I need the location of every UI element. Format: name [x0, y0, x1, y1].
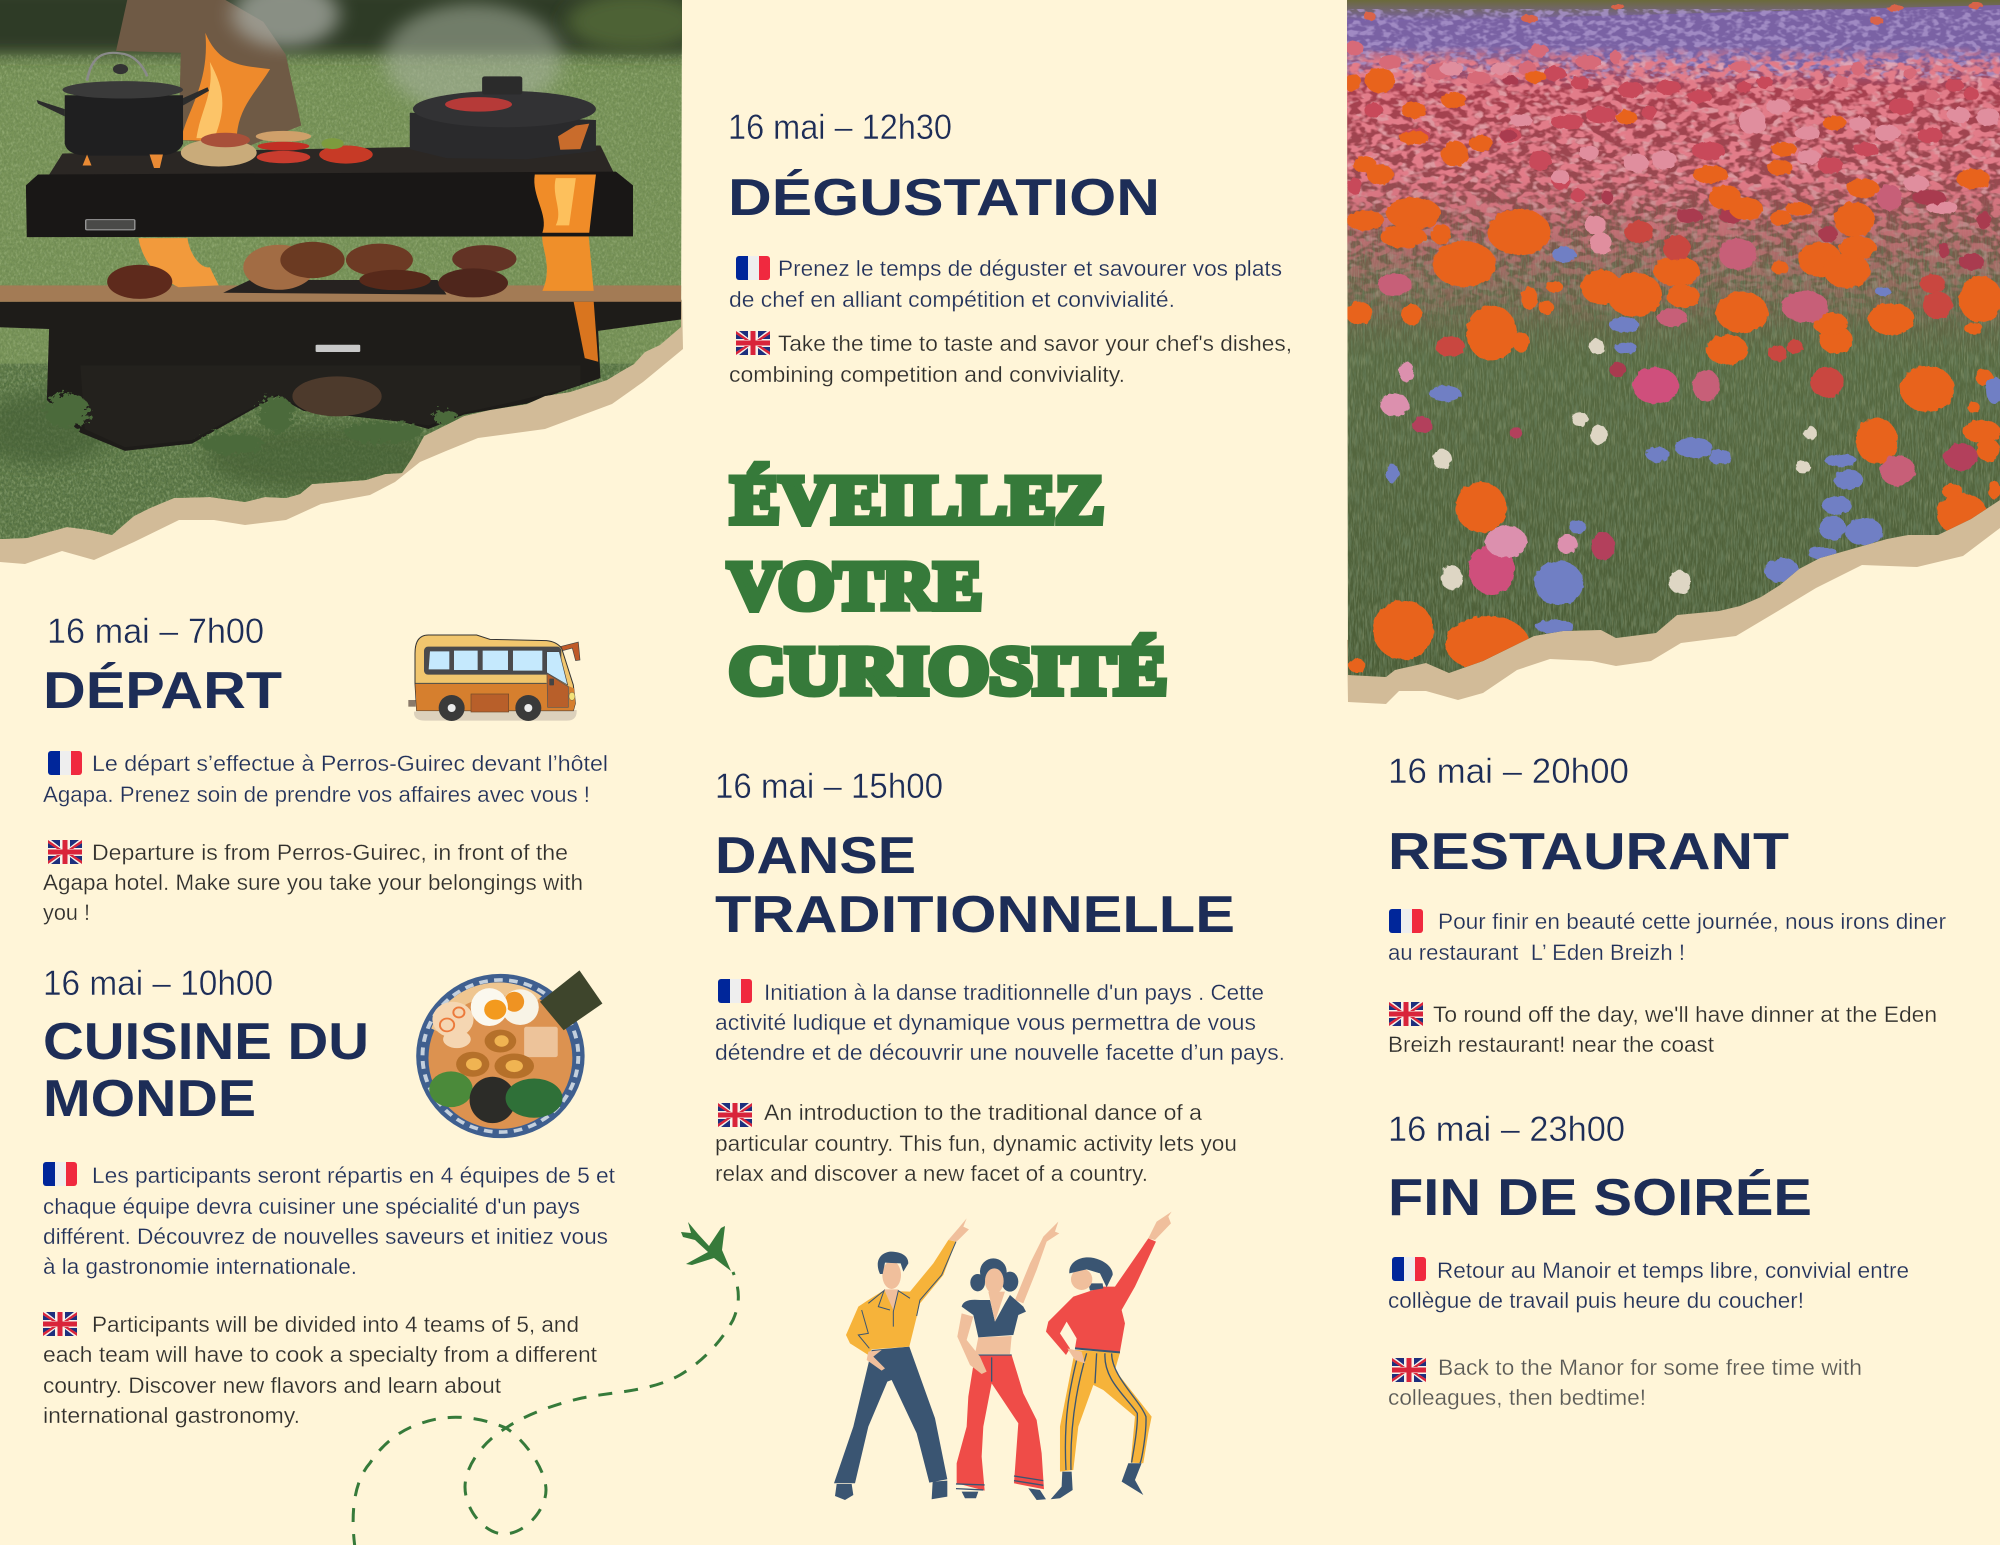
photo: flower field — [1340, 0, 2000, 689]
text block: cuisine French: Les participants seront répartis en 4 équipes de 5 et — [92, 1163, 615, 1188]
drawer shelf — [49, 146, 614, 174]
low flames — [138, 238, 219, 287]
icon: UK flag — [43, 1312, 77, 1336]
text block: danse French: Initiation à la danse traditionnelle d'un pays . Cette — [764, 980, 1264, 1005]
icon: UK flag — [48, 840, 82, 864]
text block: fin de soiree English — [1388, 1355, 1862, 1410]
heading: depart: DÉPART — [43, 662, 282, 720]
icon: French flag — [1389, 909, 1423, 933]
heading: cuisine du monde: MONDE — [43, 1070, 256, 1128]
text block: cuisine French: différent. Découvrez de nouvelles saveurs et initiez vous — [43, 1224, 608, 1249]
text block: depart English: Departure is from Perros-Guirec, in front of the — [92, 840, 568, 865]
text block: degustation English — [729, 331, 1292, 387]
text block: fin de soiree English: colleagues, then bedtime! — [1388, 1385, 1646, 1410]
heading: danse traditionnelle — [715, 827, 1235, 944]
title: ÉVEILLEZ — [731, 462, 1104, 538]
text block: degustation English: Take the time to taste and savor your chef's dishes, — [778, 331, 1292, 356]
plants in front of the box — [45, 393, 460, 455]
text block: cuisine English — [43, 1312, 597, 1428]
text block: restaurant French: Pour finir en beauté cette journée, nous irons diner — [1438, 909, 1946, 934]
text block: cuisine English: international gastronomy. — [43, 1403, 300, 1428]
text block: degustation French: Prenez le temps de déguster et savourer vos plats — [778, 256, 1282, 281]
icon: French flag — [1392, 1257, 1426, 1281]
icon: UK flag — [1389, 1002, 1423, 1026]
text block: danse French: détendre et de découvrir une nouvelle facette d’un pays. — [715, 1040, 1285, 1065]
heading: cuisine du monde — [43, 1013, 369, 1128]
text block: restaurant English: To round off the day, we'll have dinner at the Eden — [1433, 1002, 1937, 1027]
icon: bus — [408, 635, 580, 721]
foreground grass — [0, 364, 634, 539]
panel: degustation — [728, 108, 1292, 387]
lower box — [0, 299, 683, 451]
text block: depart French: Le départ s’effectue à Perros-Guirec devant l’hôtel — [92, 751, 608, 776]
photo: grill torn paper edge — [0, 300, 683, 564]
heading: degustation: DÉGUSTATION — [728, 169, 1160, 227]
dancer 3 — [1046, 1212, 1172, 1499]
text block: depart French: Agapa. Prenez soin de prendre vos affaires avec vous ! — [43, 782, 590, 807]
text block: depart English: you ! — [43, 900, 90, 925]
date: cuisine: 16 mai – 10h00 — [43, 964, 273, 1003]
text block: danse English: An introduction to the traditional dance of a — [764, 1100, 1203, 1125]
text block: restaurant French: au restaurant L’ Eden Breizh ! — [1388, 940, 1685, 965]
text block: cuisine French — [43, 1163, 615, 1279]
icon: plane — [681, 1222, 731, 1271]
date: restaurant: 16 mai – 20h00 — [1388, 752, 1629, 791]
text block: depart French — [43, 751, 608, 807]
text block: danse English: particular country. This fun, dynamic activity lets you — [715, 1131, 1237, 1156]
text block: danse French — [715, 980, 1285, 1065]
panel: fin de soiree — [1388, 1110, 1909, 1410]
title: VOTRE — [728, 548, 982, 624]
photo: flower field torn paper edge — [1347, 460, 2000, 704]
icon: UK flag — [1392, 1358, 1426, 1382]
text block: cuisine French: à la gastronomie internationale. — [43, 1254, 357, 1279]
heading: cuisine du monde: CUISINE DU — [43, 1013, 369, 1071]
panel: depart — [43, 612, 608, 925]
photo: outdoor grill with food and flames — [0, 0, 714, 545]
date: degustation: 16 mai – 12h30 — [728, 108, 952, 147]
text block: degustation French: de chef en alliant compétition et convivialité. — [729, 287, 1175, 312]
panel: cuisine du monde — [43, 964, 615, 1428]
icon: French flag — [718, 979, 752, 1003]
text block: restaurant French — [1388, 909, 1946, 965]
text block: danse English — [715, 1100, 1237, 1186]
text block: cuisine English: country. Discover new flavors and learn about — [43, 1373, 501, 1398]
plank — [0, 285, 685, 302]
text block: depart English — [43, 840, 583, 925]
text block: danse French: activité ludique et dynamique vous permettra de vous — [715, 1010, 1256, 1035]
food on shelf — [181, 139, 257, 167]
icon: French flag — [736, 256, 770, 280]
title: CURIOSITÉ — [729, 632, 1167, 708]
text block: fin de soiree French — [1388, 1258, 1909, 1313]
text block: degustation English: combining competition and conviviality. — [729, 362, 1125, 387]
text block: depart English: Agapa hotel. Make sure you take your belongings with — [43, 870, 583, 895]
heading: danse traditionnelle: DANSE — [715, 827, 916, 885]
pot — [37, 87, 209, 116]
title — [728, 462, 1167, 708]
text block: degustation French — [729, 256, 1282, 312]
text block: fin de soiree French: collègue de travail puis heure du coucher! — [1388, 1288, 1804, 1313]
text block: cuisine English: each team will have to cook a specialty from a different — [43, 1342, 597, 1367]
text block: restaurant English — [1388, 1002, 1937, 1057]
panel: restaurant — [1388, 752, 1946, 1057]
dashed flight path — [353, 1272, 738, 1545]
date: danse: 16 mai – 15h00 — [715, 767, 943, 806]
text block: fin de soiree English: Back to the Manor for some free time with — [1438, 1355, 1862, 1380]
text block: cuisine English: Participants will be divided into 4 teams of 5, and — [92, 1312, 579, 1337]
heading: danse traditionnelle: TRADITIONNELLE — [715, 886, 1235, 944]
icon: French flag — [43, 1162, 77, 1186]
icon: French flag — [48, 751, 82, 775]
text block: fin de soiree French: Retour au Manoir et temps libre, convivial entre — [1437, 1258, 1909, 1283]
icon: ramen bowl — [416, 970, 602, 1138]
heading: restaurant: RESTAURANT — [1388, 823, 1789, 881]
illustration: three dancers — [834, 1212, 1172, 1500]
heading: fin de soiree: FIN DE SOIRÉE — [1388, 1169, 1812, 1227]
dancer 2 — [956, 1222, 1059, 1500]
date: depart: 16 mai – 7h00 — [47, 612, 264, 651]
pan — [410, 112, 596, 148]
icon: UK flag — [718, 1103, 752, 1127]
date: fin de soiree: 16 mai – 23h00 — [1388, 1110, 1625, 1149]
panel: danse traditionnelle — [715, 767, 1285, 1500]
text block: restaurant English: Breizh restaurant! near the coast — [1388, 1032, 1714, 1057]
text block: danse English: relax and discover a new facet of a country. — [715, 1161, 1148, 1186]
dancer 1 — [834, 1218, 969, 1500]
lower food — [107, 265, 172, 299]
text block: cuisine French: chaque équipe devra cuisiner une spécialité d'un pays — [43, 1194, 580, 1219]
icon: UK flag — [736, 331, 770, 355]
